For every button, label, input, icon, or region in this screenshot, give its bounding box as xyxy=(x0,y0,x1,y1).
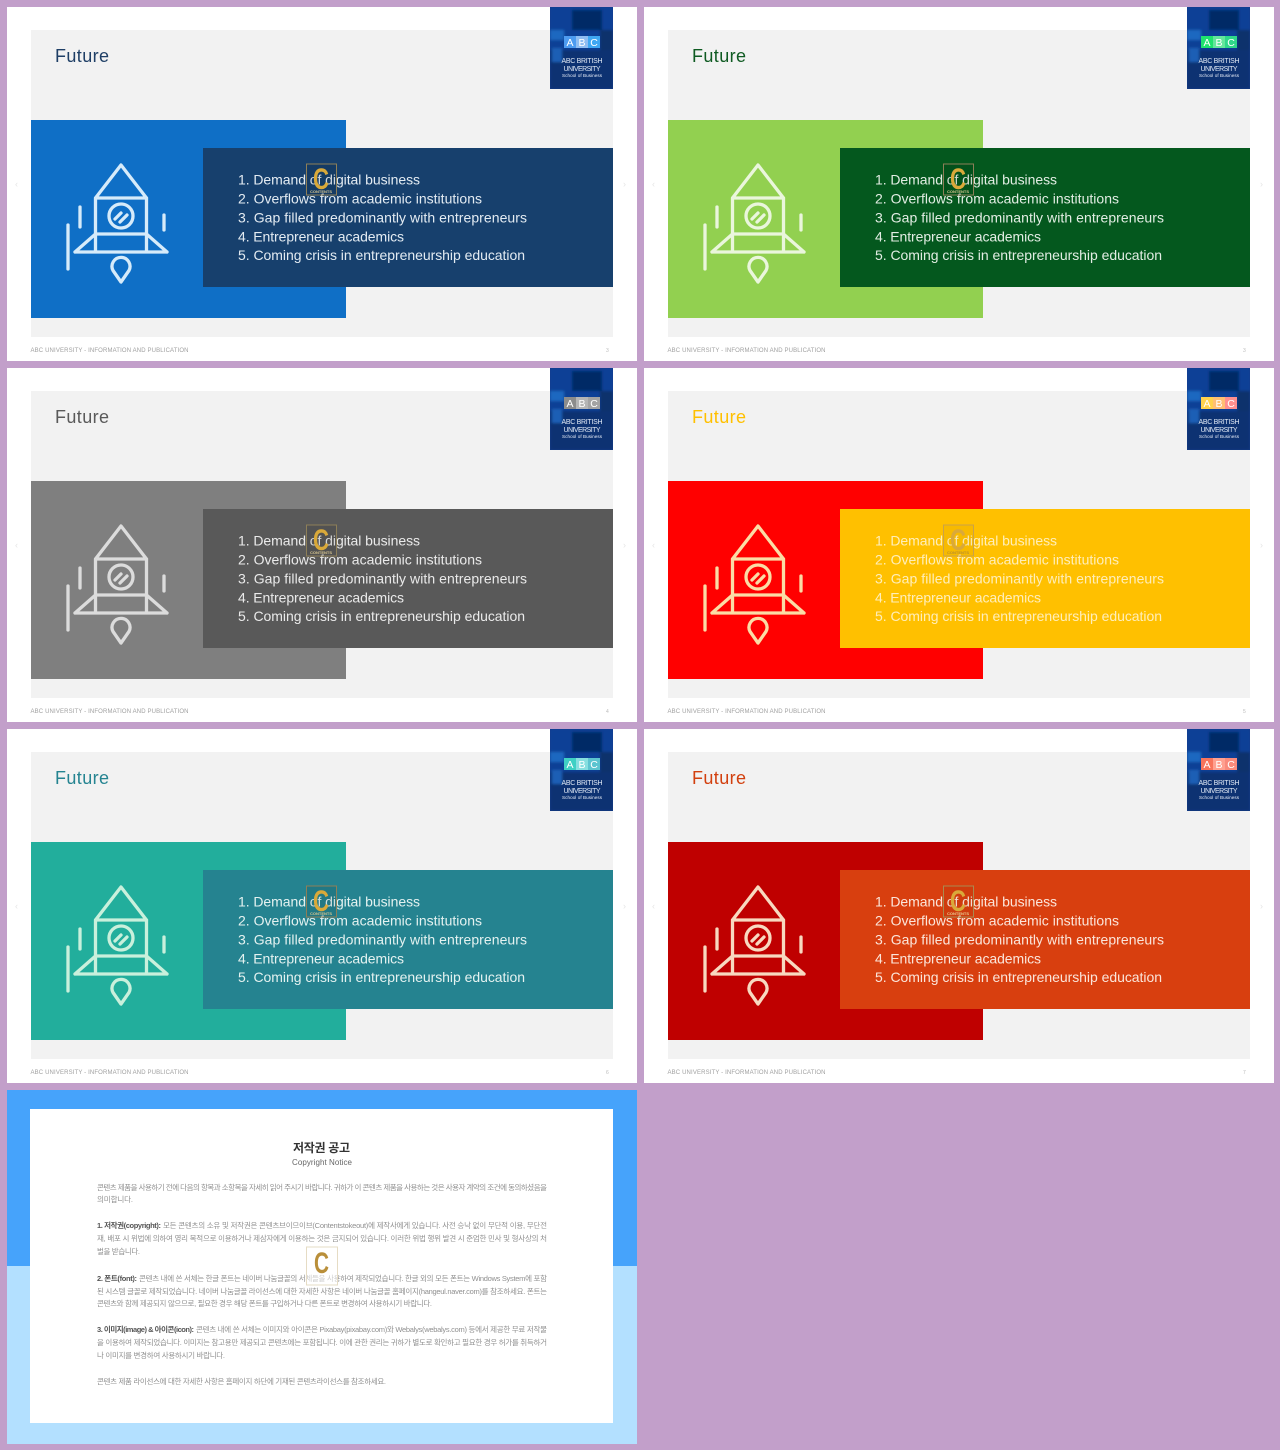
colour block xyxy=(31,842,346,1040)
watermark: C xyxy=(314,1247,329,1280)
list: 2. Overflows from academic institutions xyxy=(875,912,1119,928)
list: 1. Demand of digital business xyxy=(875,172,1057,188)
notice body: 을 이용하여 제작되었습니다. 이미지는 참고용만 제공되고 콘텐츠에는 포함됩니다. 이에 관한 권리는 귀하가 별도로 확인하고 필요한 경우 허가를 취득하거 xyxy=(97,1337,547,1347)
logo: B xyxy=(578,759,586,771)
logo: C xyxy=(1227,759,1235,771)
slide: red and yellow xyxy=(644,368,1274,722)
colour block xyxy=(668,120,983,318)
watermark: C xyxy=(313,524,329,557)
list: 3. Gap filled predominantly with entrepreneurs xyxy=(238,210,527,226)
logo: A xyxy=(1203,759,1211,771)
logo: C xyxy=(1227,398,1235,410)
list: 3. Gap filled predominantly with entrepreneurs xyxy=(238,932,527,948)
arrows: › xyxy=(623,540,626,550)
colour block xyxy=(668,481,983,679)
page number: 6 xyxy=(606,1070,609,1076)
notice body: 된 시스템 글꼴로 제작되었습니다. 네이버 나눔글꼴 라이선스에 대한 자세한 사항은 네이버 나눔글꼴 홈페이지(hangeul.naver.com)를 참조하세요. 폰트는 xyxy=(97,1286,547,1296)
page number: 4 xyxy=(606,709,609,715)
notice body: 나 이미지를 변경하여 사용하시기 바랍니다. xyxy=(97,1350,225,1360)
list xyxy=(875,894,1164,985)
icon: rocket xyxy=(705,887,804,1004)
text band xyxy=(203,870,613,1009)
arrows xyxy=(652,179,1263,189)
logo: B xyxy=(1215,398,1223,410)
logo: B xyxy=(578,398,586,410)
footer: ABC UNIVERSITY - INFORMATION AND PUBLICATION xyxy=(668,348,826,354)
colour block xyxy=(668,842,983,1040)
logo: A xyxy=(566,37,574,49)
list: 2. Overflows from academic institutions xyxy=(238,190,482,206)
logo: C xyxy=(590,759,598,771)
heading: Future xyxy=(55,46,109,66)
list: 1. Demand of digital business xyxy=(875,532,1057,548)
footer: ABC UNIVERSITY - INFORMATION AND PUBLICATION xyxy=(30,709,188,715)
notice body xyxy=(97,1182,547,1386)
arrows: ‹ xyxy=(652,179,655,189)
page number: 5 xyxy=(1243,709,1246,715)
footer: ABC UNIVERSITY - INFORMATION AND PUBLICATION xyxy=(668,709,826,715)
notice subheading: Copyright Notice xyxy=(292,1158,353,1167)
logo: ABC BRITISH xyxy=(562,58,602,65)
list: 3. Gap filled predominantly with entrepreneurs xyxy=(875,932,1164,948)
slide: teal xyxy=(7,729,637,1083)
logo xyxy=(1187,7,1250,89)
logo: A xyxy=(566,398,574,410)
arrows xyxy=(652,540,1263,550)
logo: School of Business xyxy=(562,434,603,439)
list: 5. Coming crisis in entrepreneurship education xyxy=(875,247,1162,263)
logo: UNIVERSITY xyxy=(564,66,601,73)
notice body: 1. 저작권(copyright): xyxy=(97,1220,161,1230)
list: 4. Entrepreneur academics xyxy=(238,590,404,606)
icon: rocket xyxy=(705,526,804,643)
list: 5. Coming crisis in entrepreneurship education xyxy=(238,608,525,624)
arrows: ‹ xyxy=(15,901,18,911)
arrows: › xyxy=(1260,179,1263,189)
logo xyxy=(550,368,613,450)
arrows xyxy=(15,901,626,911)
logo xyxy=(1187,368,1250,450)
text band xyxy=(840,870,1250,1009)
footer: ABC UNIVERSITY - INFORMATION AND PUBLICATION xyxy=(30,348,188,354)
logo: ABC BRITISH xyxy=(1198,419,1240,426)
list xyxy=(238,894,527,985)
list: 4. Entrepreneur academics xyxy=(238,228,404,244)
notice body: 콘텐츠 내에 쓴 서체는 한글 폰트는 네이버 나눔글꼴의 서체들을 사용하여 제작되었습니다. 한글 외의 모든 폰트는 Windows System에 포함 xyxy=(139,1273,547,1283)
watermark: CONTENTS xyxy=(947,189,969,194)
arrows: › xyxy=(623,179,626,189)
logo: School of Business xyxy=(562,73,603,78)
arrows: › xyxy=(1260,901,1263,911)
list: 3. Gap filled predominantly with entrepreneurs xyxy=(875,210,1164,226)
notice body: 2. 폰트(font): xyxy=(97,1274,137,1283)
logo xyxy=(1187,729,1250,811)
arrows: ‹ xyxy=(652,540,655,550)
slide: grey xyxy=(7,368,637,722)
logo: ABC BRITISH xyxy=(1198,780,1240,787)
logo: A xyxy=(566,759,574,771)
page number: 3 xyxy=(606,348,609,354)
logo: C xyxy=(1227,37,1235,49)
text band xyxy=(840,509,1250,648)
heading: Future xyxy=(692,46,746,66)
heading: Future xyxy=(55,768,109,788)
list: 4. Entrepreneur academics xyxy=(875,950,1041,966)
list xyxy=(875,172,1164,263)
icon: rocket xyxy=(705,165,804,282)
notice body: 벌을 받습니다. xyxy=(97,1246,140,1256)
arrows xyxy=(15,179,626,189)
logo xyxy=(550,7,613,89)
notice body: 의미합니다. xyxy=(97,1194,133,1204)
slide: green xyxy=(644,7,1274,361)
watermark: C xyxy=(313,163,329,196)
text band xyxy=(203,148,613,287)
list xyxy=(875,532,1164,624)
list xyxy=(238,172,527,263)
list: 5. Coming crisis in entrepreneurship education xyxy=(238,247,525,263)
icon: rocket xyxy=(68,165,167,282)
logo: C xyxy=(590,37,598,49)
footer: ABC UNIVERSITY - INFORMATION AND PUBLICATION xyxy=(30,1070,188,1076)
list: 1. Demand of digital business xyxy=(238,894,420,910)
list: 1. Demand of digital business xyxy=(238,172,420,188)
arrows: › xyxy=(623,901,626,911)
logo xyxy=(550,729,613,811)
notice heading: 저작권 공고 xyxy=(293,1140,350,1155)
watermark: C xyxy=(950,524,966,557)
list: 3. Gap filled predominantly with entrepreneurs xyxy=(238,570,527,586)
logo: UNIVERSITY xyxy=(1200,788,1238,795)
watermark: C xyxy=(950,163,966,196)
arrows: ‹ xyxy=(15,540,18,550)
logo: B xyxy=(1215,37,1223,49)
watermark: CONTENTS xyxy=(310,550,332,555)
logo: B xyxy=(1215,759,1223,771)
list: 4. Entrepreneur academics xyxy=(238,950,404,966)
logo: ABC BRITISH xyxy=(562,419,602,426)
logo: School of Business xyxy=(1199,434,1240,439)
icon: rocket xyxy=(68,887,167,1004)
notice body: 재, 배포 시 위법에 의하여 영리 목적으로 이용하거나 제삼자에게 이용하는 것은 금지되어 있습니다. 이러한 위법 행위 발견 시 준엄한 민사 및 형사상의 처 xyxy=(97,1233,547,1243)
watermark: C xyxy=(950,885,966,918)
logo: School of Business xyxy=(1199,795,1240,800)
logo: A xyxy=(1203,398,1211,410)
notice body: 3. 이미지(image) & 아이콘(icon): xyxy=(97,1324,194,1334)
arrows: ‹ xyxy=(15,179,18,189)
list: 5. Coming crisis in entrepreneurship education xyxy=(875,969,1162,985)
logo: ABC BRITISH xyxy=(1198,58,1240,65)
page number: 7 xyxy=(1243,1070,1246,1076)
arrows xyxy=(652,901,1263,911)
watermark xyxy=(306,1247,338,1285)
slide: dark red xyxy=(644,729,1274,1083)
text band xyxy=(203,509,613,648)
colour block xyxy=(31,481,346,679)
notice body: 모든 콘텐츠의 소유 및 저작권은 콘텐츠브이므이브(Contentstokeout)에 제작사에게 있습니다. 사전 승낙 없이 무단적 이용, 무단전 xyxy=(163,1220,547,1230)
icon: rocket xyxy=(68,526,167,643)
arrows: ‹ xyxy=(652,901,655,911)
list: 4. Entrepreneur academics xyxy=(875,590,1041,606)
list xyxy=(238,532,527,624)
notice body: 콘텐츠 내에 쓴 서체는 이미지와 아이콘은 Pixabay(pixabay.com)와 Webalys(webalys.com) 등에서 제공한 무료 저작물 xyxy=(196,1324,547,1334)
logo: UNIVERSITY xyxy=(564,788,601,795)
list: 2. Overflows from academic institutions xyxy=(238,912,482,928)
notice panel xyxy=(30,1109,613,1423)
list: 2. Overflows from academic institutions xyxy=(238,552,482,568)
watermark: CONTENTS xyxy=(947,911,969,916)
notice body: 콘텐츠 제품 라이선스에 대한 자세한 사항은 홈페이지 하단에 기재된 콘텐츠라이선스를 참조하세요. xyxy=(97,1376,386,1386)
heading: Future xyxy=(692,768,746,788)
list: 1. Demand of digital business xyxy=(875,894,1057,910)
list: 5. Coming crisis in entrepreneurship education xyxy=(875,608,1162,624)
page number: 3 xyxy=(1243,348,1246,354)
arrows xyxy=(15,540,626,550)
slide: blue xyxy=(7,7,637,361)
heading: Future xyxy=(55,407,109,427)
logo: C xyxy=(590,398,598,410)
logo: B xyxy=(578,37,586,49)
notice body: 콘텐츠와 함께 제공되지 않으므로, 필요한 경우 해당 폰트를 구입하거나 다른 폰트로 변경하여 사용하시기 바랍니다. xyxy=(97,1298,432,1308)
colour block xyxy=(31,120,346,318)
logo: School of Business xyxy=(562,795,603,800)
list: 1. Demand of digital business xyxy=(238,532,420,548)
list: 4. Entrepreneur academics xyxy=(875,228,1041,244)
heading: Future xyxy=(692,407,746,427)
list: 2. Overflows from academic institutions xyxy=(875,552,1119,568)
list: 2. Overflows from academic institutions xyxy=(875,190,1119,206)
logo: UNIVERSITY xyxy=(564,427,601,434)
watermark: C xyxy=(313,885,329,918)
watermark: CONTENTS xyxy=(310,189,332,194)
footer: ABC UNIVERSITY - INFORMATION AND PUBLICATION xyxy=(668,1070,826,1076)
logo: A xyxy=(1203,37,1211,49)
notice body: 콘텐츠 제품을 사용하기 전에 다음의 항목과 소항목을 자세히 읽어 주시기 바랍니다. 귀하가 이 콘텐츠 제품을 사용하는 것은 사용자 계약의 조건에 동의하셨음을 xyxy=(97,1182,547,1192)
arrows: › xyxy=(1260,540,1263,550)
logo: ABC BRITISH xyxy=(562,780,602,787)
logo: UNIVERSITY xyxy=(1200,427,1238,434)
text band xyxy=(840,148,1250,287)
watermark: CONTENTS xyxy=(947,550,969,555)
logo: UNIVERSITY xyxy=(1200,66,1238,73)
slide: copyright notice xyxy=(7,1090,637,1444)
list: 5. Coming crisis in entrepreneurship education xyxy=(238,969,525,985)
watermark: CONTENTS xyxy=(310,911,332,916)
list: 3. Gap filled predominantly with entrepreneurs xyxy=(875,570,1164,586)
logo: School of Business xyxy=(1199,73,1240,78)
